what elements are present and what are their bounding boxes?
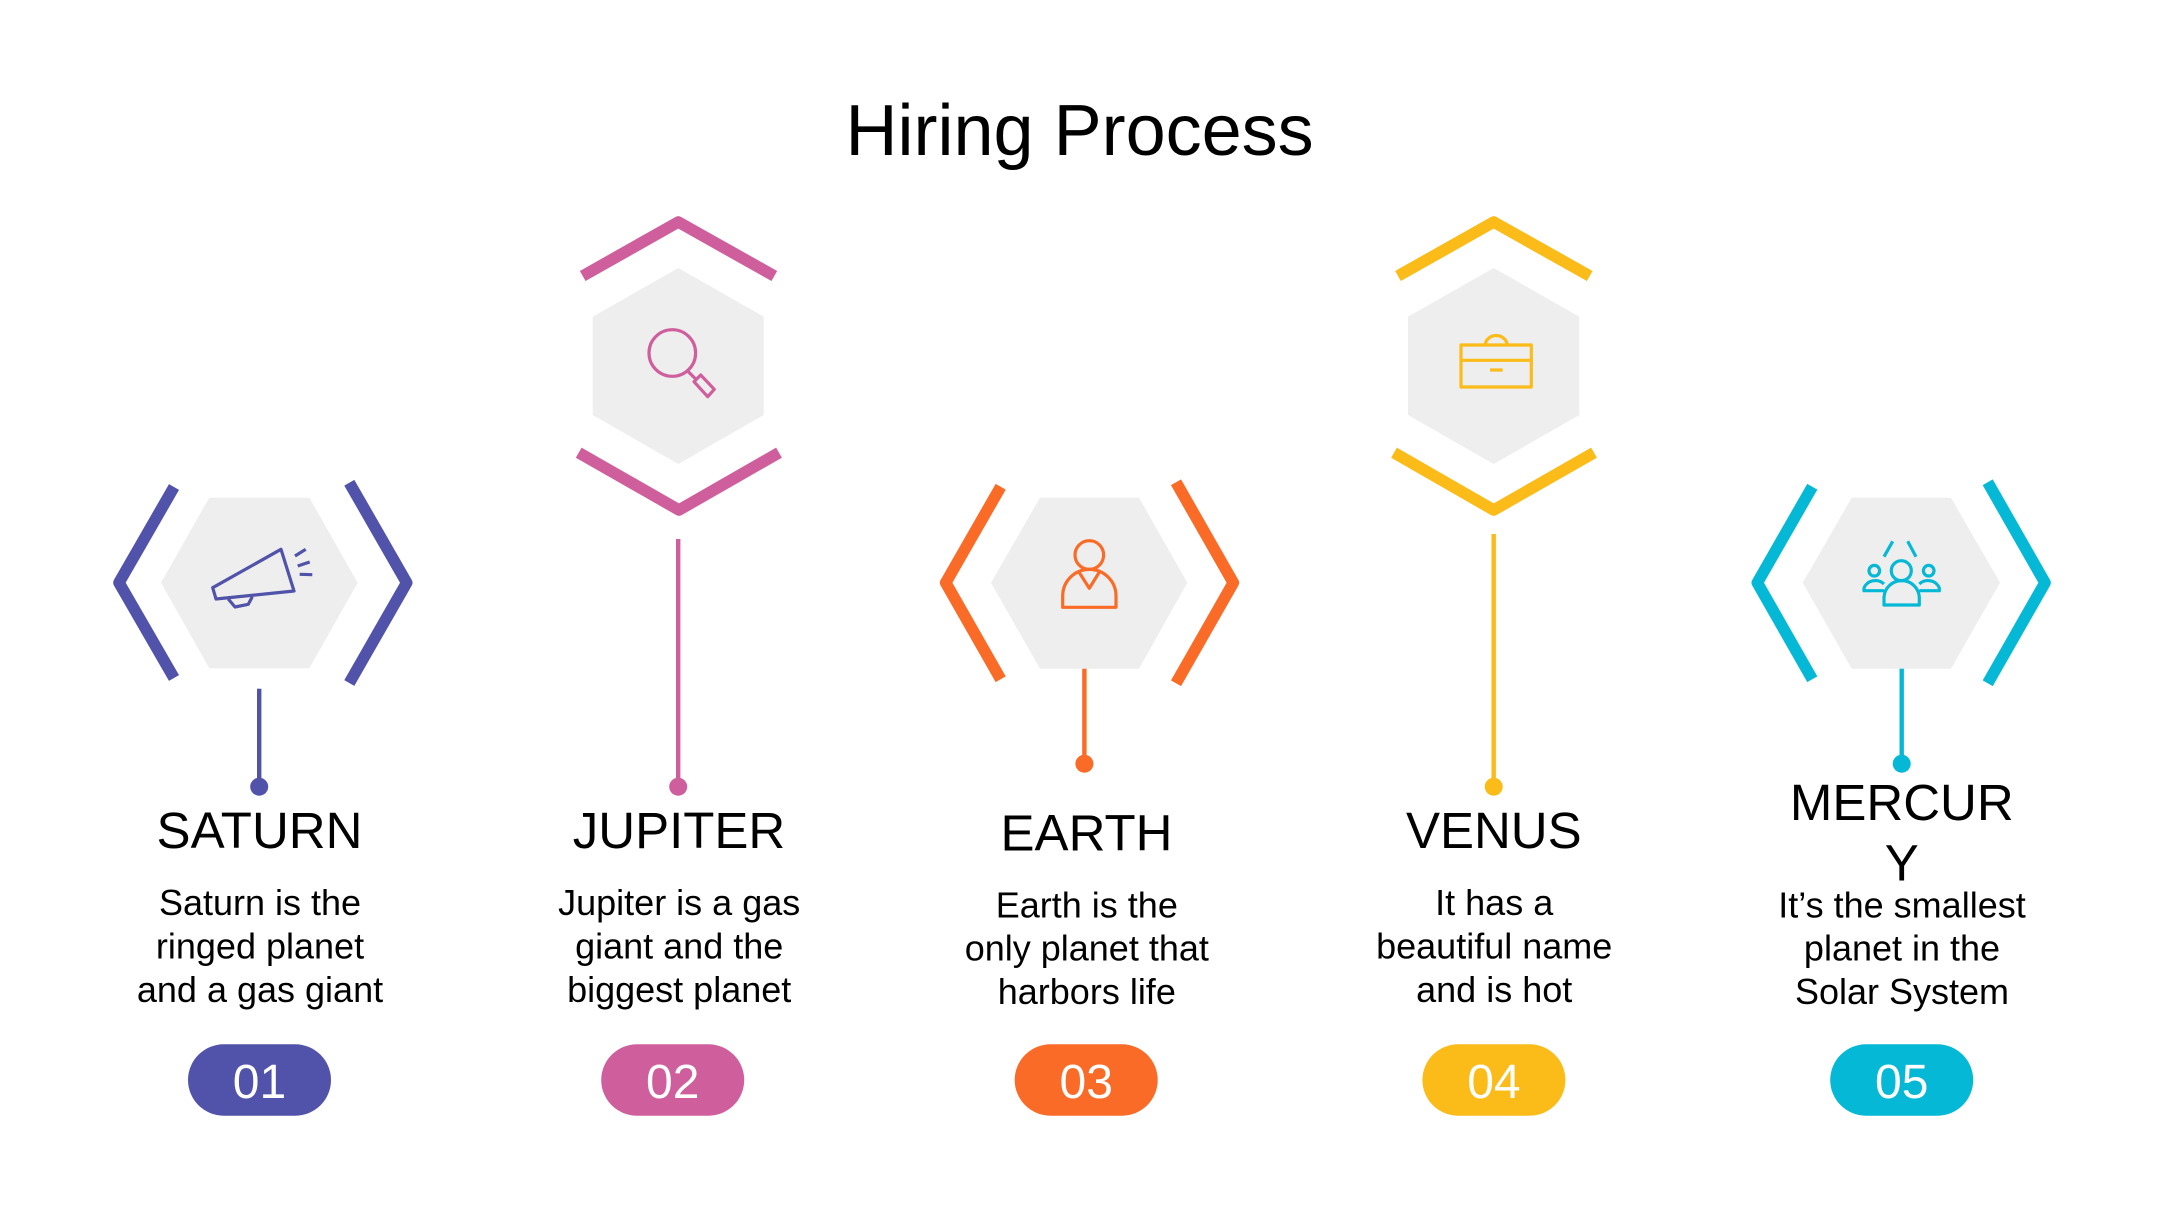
- icon: briefcase: [1461, 335, 1531, 387]
- description: Jupiter: biggest planet: [567, 969, 791, 1010]
- icon: magnifying glass: [649, 330, 714, 397]
- left chevron: [119, 487, 174, 678]
- description: Mercury: It’s the smallest: [1778, 884, 2026, 925]
- icon: person: [1063, 541, 1116, 607]
- number badge 05: [1830, 1044, 1973, 1116]
- description: Saturn: and a gas giant: [137, 969, 383, 1010]
- heading: Mercury: MERCUR: [1790, 774, 2014, 831]
- description: Saturn: ringed planet: [156, 926, 364, 966]
- top chevron: [1398, 222, 1590, 276]
- left chevron: [946, 487, 1001, 679]
- heading: Earth: EARTH: [1001, 804, 1172, 862]
- title: Hiring Process: [846, 91, 1314, 171]
- description: Mercury: planet in the: [1804, 928, 2000, 969]
- top chevron: [583, 222, 774, 276]
- bottom chevron: [579, 453, 779, 510]
- number badge 05: 05: [1875, 1056, 1928, 1109]
- description: Venus: beautiful name: [1376, 926, 1612, 966]
- hexagon backdrop: [593, 268, 764, 464]
- number badge 03: 03: [1060, 1056, 1113, 1109]
- hexagon backdrop: [991, 498, 1187, 669]
- number badge 02: [601, 1044, 744, 1116]
- number badge 01: [188, 1044, 331, 1116]
- description: Earth: only planet that: [965, 928, 1209, 969]
- icon: megaphone: [213, 549, 312, 607]
- description: Earth: Earth is the: [996, 884, 1178, 925]
- connector line with dot: [250, 689, 268, 796]
- number badge 02: 02: [646, 1056, 699, 1109]
- heading: Venus: VENUS: [1406, 802, 1582, 859]
- connector line with dot: [1893, 669, 1911, 773]
- connector line with dot: [1485, 534, 1503, 796]
- left chevron: [1757, 487, 1812, 679]
- heading: Saturn: SATURN: [157, 802, 362, 859]
- panel: Venus step 04: [1376, 222, 1612, 1116]
- hexagon backdrop: [1408, 268, 1579, 464]
- bottom chevron: [1394, 453, 1594, 510]
- number badge 04: [1422, 1044, 1565, 1116]
- hexagon backdrop: [1803, 498, 2000, 669]
- connector line with dot: [1075, 669, 1093, 773]
- number badge 01: 01: [233, 1056, 286, 1109]
- description: Jupiter: giant and the: [575, 926, 783, 966]
- right chevron: [1176, 482, 1233, 683]
- icon: team of people: [1864, 541, 1939, 605]
- hexagon backdrop: [161, 498, 358, 668]
- description: Saturn: Saturn is the: [159, 882, 361, 923]
- panel: Jupiter step 02: [558, 222, 800, 1116]
- right chevron: [349, 483, 407, 683]
- panel: Earth step 03: [946, 482, 1233, 1116]
- description: Venus: It has a: [1435, 882, 1554, 923]
- heading: Mercury: Y: [1885, 834, 1919, 892]
- panel: Saturn step 01: [119, 483, 407, 1116]
- description: Venus: and is hot: [1416, 969, 1572, 1010]
- connector line with dot: [669, 539, 687, 796]
- number badge 04: 04: [1467, 1056, 1521, 1109]
- panel: Mercury step 05: [1757, 482, 2045, 1116]
- description: Earth: harbors life: [998, 971, 1176, 1012]
- right chevron: [1988, 482, 2045, 683]
- heading: Jupiter: JUPITER: [573, 802, 785, 859]
- description: Mercury: Solar System: [1795, 971, 2009, 1012]
- number badge 03: [1015, 1044, 1158, 1116]
- description: Jupiter: Jupiter is a gas: [558, 882, 800, 923]
